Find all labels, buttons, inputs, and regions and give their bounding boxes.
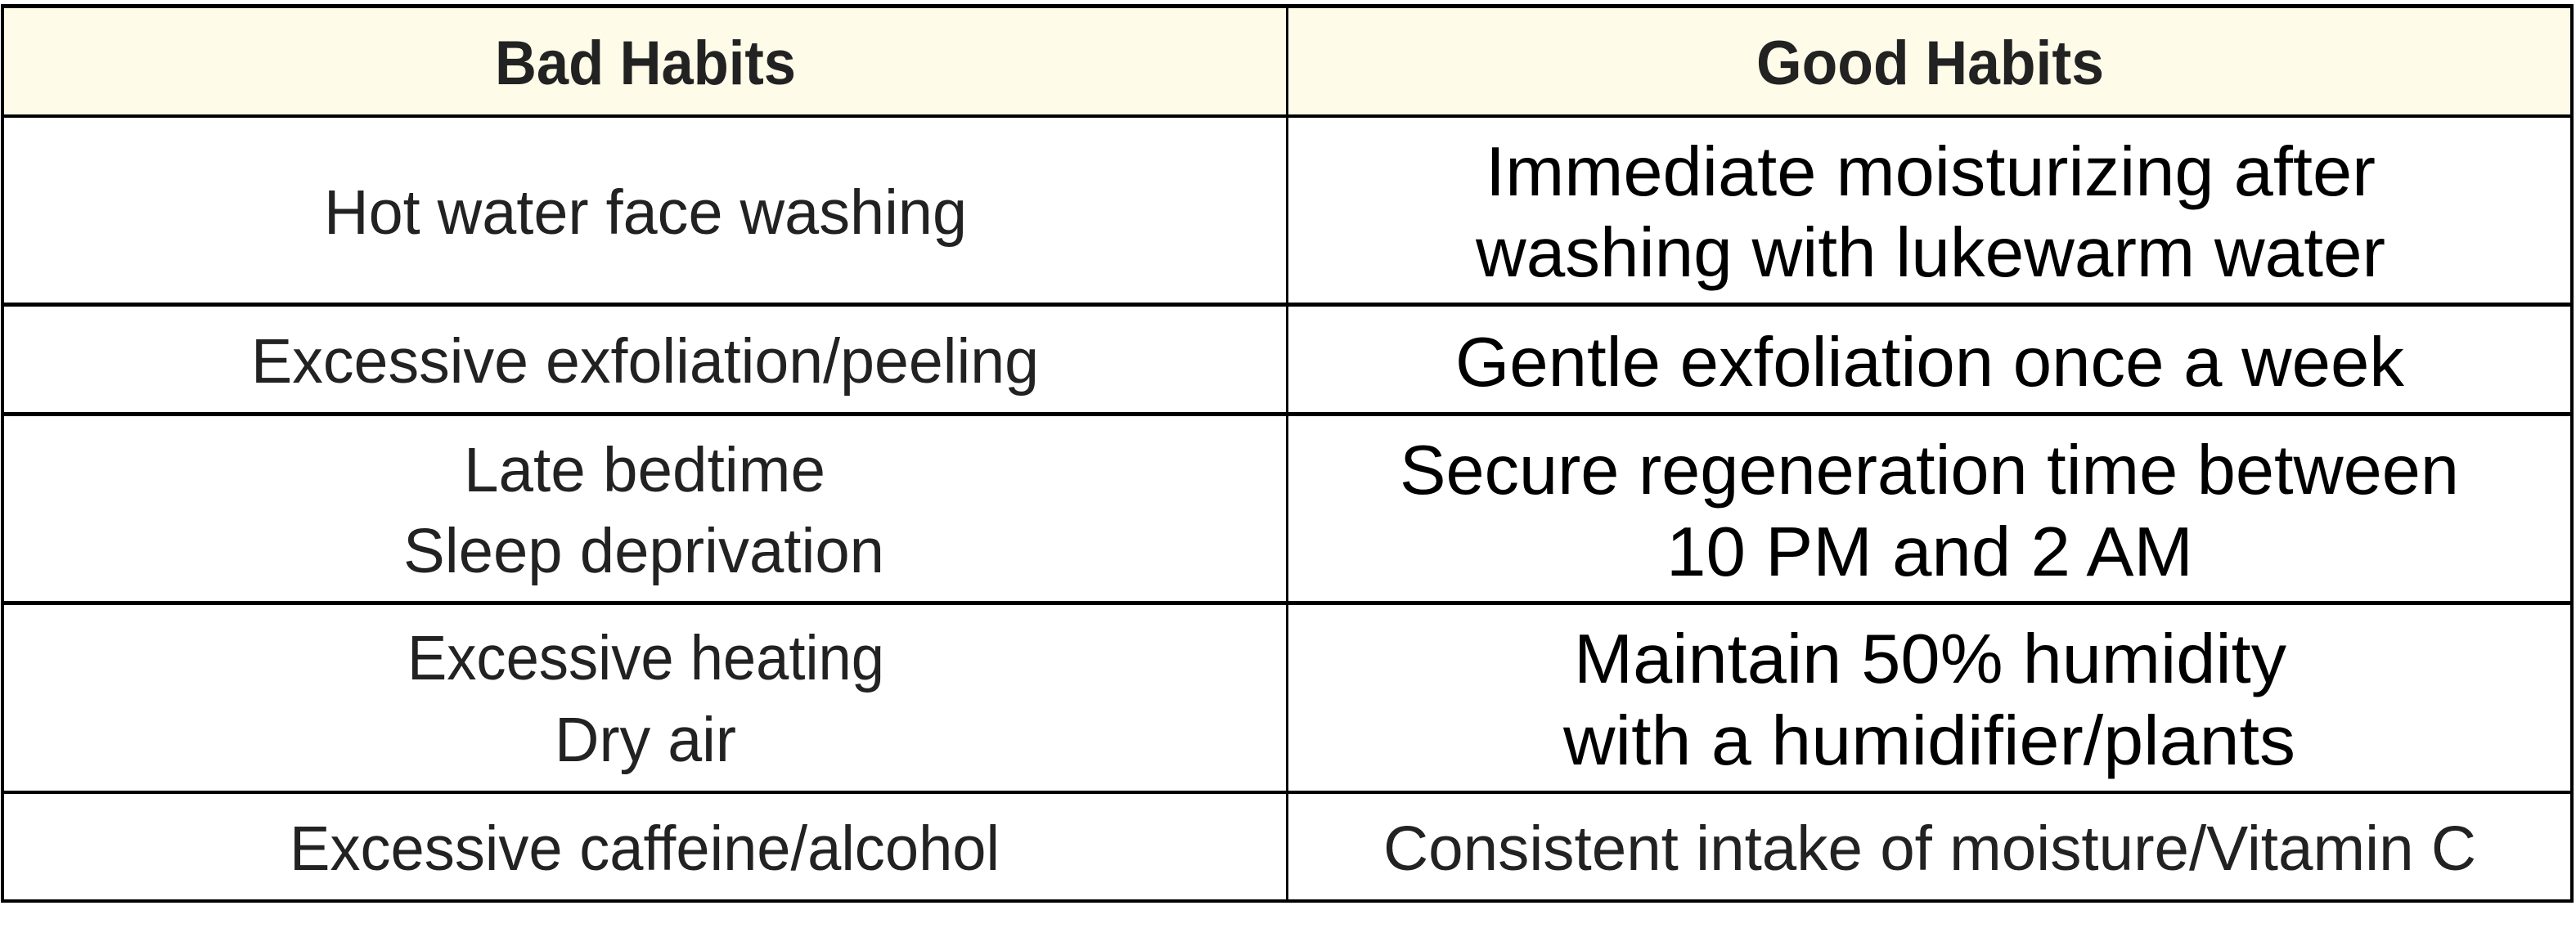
row 1: face washing [324, 133, 2385, 292]
good habit text: 10 PM and 2 AM [1666, 513, 2193, 591]
row 3: sleep [403, 432, 2459, 591]
good habit text [1562, 621, 2295, 780]
good habit text: Immediate moisturizing after [1486, 133, 2376, 211]
bad habit text [407, 623, 884, 775]
good habit text: Gentle exfoliation once a week [1455, 324, 2404, 401]
good habit text [1475, 133, 2385, 292]
bad habit text: Hot water face washing [324, 177, 967, 248]
bad habit text: Excessive heating [407, 623, 884, 693]
table header row [2, 7, 2572, 116]
row 2: exfoliation [251, 324, 2404, 401]
bad habit text [403, 435, 884, 586]
bad habit text: Dry air [555, 705, 736, 775]
bad habit text: Sleep deprivation [403, 516, 884, 586]
good habit text [1400, 432, 2459, 591]
good habit text: Secure regeneration time between [1400, 432, 2459, 509]
bad habit text: Excessive caffeine/alcohol [290, 814, 1000, 884]
good habit text: with a humidifier/plants [1562, 702, 2295, 780]
bad habit text: Excessive exfoliation/peeling [251, 326, 1039, 397]
row 4: indoor air [407, 621, 2295, 780]
good habit text: washing with lukewarm water [1475, 214, 2385, 292]
bad habit text: Late bedtime [464, 435, 825, 505]
row 5: intake [290, 814, 2476, 884]
good habit text: Maintain 50% humidity [1574, 621, 2286, 698]
heading: good habits: Good Habits [1756, 29, 2104, 98]
good habit text: Consistent intake of moisture/Vitamin C [1383, 814, 2476, 884]
heading: bad habits: Bad Habits [495, 29, 796, 98]
